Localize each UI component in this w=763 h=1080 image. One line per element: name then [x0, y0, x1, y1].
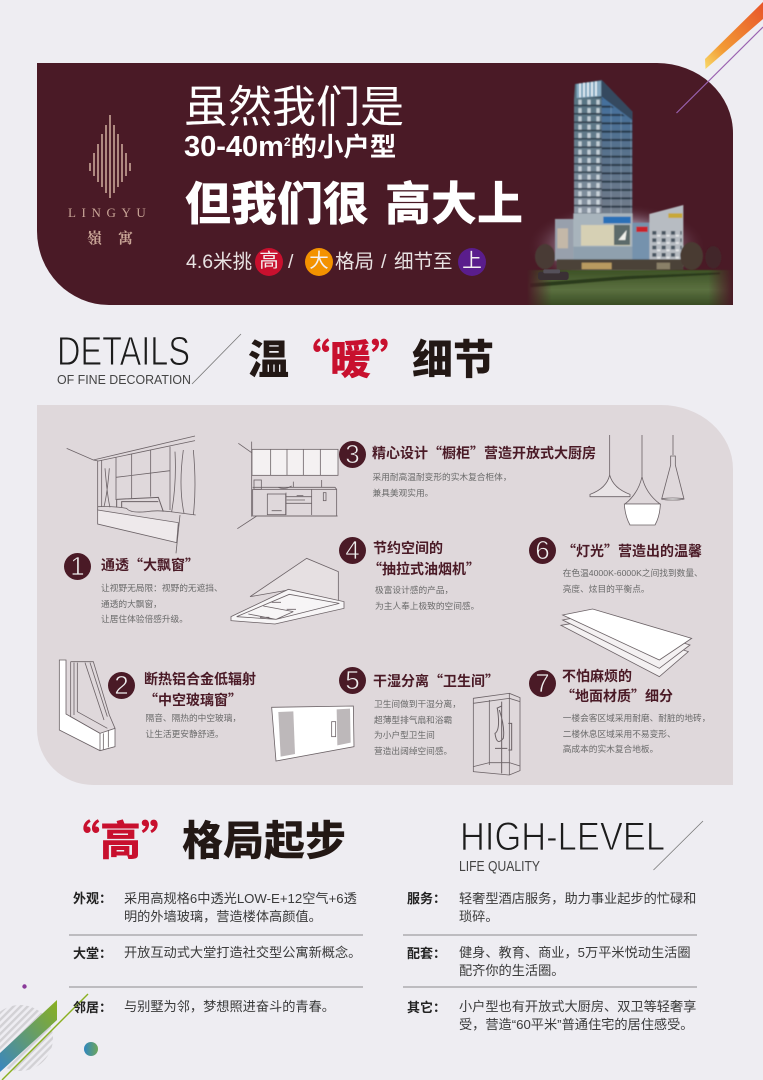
- item 1 text: 通透的大飘窗，: [101, 599, 162, 609]
- label: service: 服务：: [407, 888, 446, 907]
- icon: bay window: [67, 436, 196, 553]
- item 3: cabinets: [339, 439, 596, 498]
- item 5 text: [374, 699, 461, 756]
- heading: details english: OF FINE DECORATION: [57, 372, 191, 387]
- item 7 text: [563, 713, 710, 754]
- item 3 text: 兼具美观实用。: [372, 488, 433, 498]
- item 5 title: 干湿分离“卫生间”: [373, 671, 499, 691]
- item 2: insulated glass: [108, 669, 256, 739]
- text: other: 受，营造“60平米”普通住宅的居住感受。: [459, 1017, 693, 1032]
- number badge 7: 7: [535, 668, 550, 698]
- item 2 text: [146, 713, 241, 739]
- item 1 text: [101, 583, 223, 624]
- item 3 title: 精心设计“橱柜”营造开放式大厨房: [372, 443, 596, 463]
- text: service: [459, 891, 696, 924]
- feature list: [69, 888, 697, 1032]
- label: amenities: 配套：: [407, 943, 446, 962]
- item 1: bay window: [64, 551, 223, 624]
- item 1 title: 通透“大飘窗”: [101, 555, 199, 575]
- heading: high-level layout: “高”格局起步: [59, 807, 346, 867]
- item 5 text: 为小户型卫生间: [374, 730, 435, 740]
- heading: details english: DETAILS: [57, 328, 190, 374]
- item 4 title line 2: “抽拉式油烟机”: [368, 559, 480, 579]
- item 6: lighting: [529, 535, 703, 594]
- item 6 title: “灯光”营造出的温馨: [562, 541, 702, 561]
- item 7 text: 二楼休息区域采用不易变形、: [563, 729, 676, 739]
- item 6 text: 在色温4000K-6000K之间找到数量、: [563, 568, 703, 578]
- item 4 text: [375, 585, 479, 611]
- item 2 title: 断热铝合金低辐射: [144, 669, 256, 689]
- number badge 7: [529, 670, 556, 697]
- item 7 title: 不怕麻烦的: [562, 666, 632, 686]
- hero subline: 大: [309, 250, 329, 272]
- number badge 1: [64, 553, 91, 580]
- label: lobby: 大堂：: [73, 943, 112, 962]
- heading: high level english: LIFE QUALITY: [459, 858, 540, 875]
- item 5 text: 超薄型排气扇和浴霸: [374, 715, 452, 725]
- icon: aluminium window profile: [59, 660, 115, 751]
- item 2 title: [144, 669, 256, 710]
- text: service: 轻奢型酒店服务，助力事业起步的忙碌和: [459, 891, 696, 906]
- icon: bath heater: [272, 706, 354, 761]
- text: other: 小户型也有开放式大厨房、双卫等轻奢享: [459, 999, 696, 1014]
- number badge 2: 2: [114, 670, 129, 700]
- number badge 4: 4: [345, 535, 360, 565]
- label: neighbours: 邻居：: [73, 997, 112, 1016]
- item 4 text: 为主人奉上极致的空间感。: [375, 601, 479, 611]
- hero main slogan: 但我们很 高大上: [185, 168, 523, 234]
- text: amenities: 健身、教育、商业，5万平米悦动生活圈: [459, 945, 691, 960]
- text: amenities: [459, 945, 691, 978]
- icon: kitchen cabinets: [237, 442, 338, 529]
- icon: shower room: [473, 693, 520, 775]
- building rendering: [529, 80, 731, 305]
- item 7 text: 一楼会客区域采用耐磨、耐脏的地砖，: [563, 713, 710, 723]
- hero subline: 格局: [335, 251, 374, 273]
- logo chinese name: 嶺寓: [87, 227, 149, 248]
- logo: [68, 115, 151, 248]
- item 1 text: 让居住体验倍感升级。: [101, 614, 188, 624]
- icon: range hood: [231, 558, 344, 624]
- icon: floor planks: [561, 609, 692, 677]
- text: exterior: 采用高规格6中透光LOW-E+12空气+6透: [124, 891, 357, 906]
- item 5 text: 卫生间做到干湿分离，: [374, 699, 461, 709]
- item 4: range hood: [339, 535, 480, 611]
- number badge 3: 3: [345, 439, 360, 469]
- hero banner: [37, 63, 733, 305]
- item 7: flooring: [529, 666, 710, 754]
- hero subline: 高: [259, 250, 279, 272]
- hero subline: /: [288, 251, 293, 273]
- item 7 title line 2: “地面材质”细分: [561, 686, 673, 706]
- item 3 text: [372, 472, 512, 498]
- icon: pendant lamps: [590, 435, 684, 525]
- decoration: bottom-left shapes: [0, 984, 98, 1080]
- number badge 5: 5: [345, 665, 360, 695]
- number badge 4: [339, 537, 366, 564]
- item 4 text: 极富设计感的产品，: [375, 585, 453, 595]
- item 1 text: 让视野无局限：视野的无遮挡、: [101, 583, 223, 593]
- number badge 6: [529, 537, 556, 564]
- item 6 text: [563, 568, 703, 594]
- heading: high level english: HIGH-LEVEL: [460, 815, 665, 859]
- item 5 text: 营造出阔绰空间感。: [374, 746, 452, 756]
- panel: fine decoration details: [37, 405, 733, 785]
- logo wordmark: LINGYU: [68, 205, 151, 220]
- number badge 3: [339, 441, 366, 468]
- heading: warm details: 温“暖”细节: [248, 326, 494, 386]
- text: other: [459, 999, 696, 1032]
- item 4 title: 节约空间的: [373, 538, 443, 558]
- item 3 text: 采用耐高温耐变形的实木复合柜体，: [372, 472, 512, 482]
- number badge 1: 1: [70, 551, 85, 581]
- hero heading line 1: 虽然我们是: [184, 71, 404, 135]
- number badge 2: [108, 672, 135, 699]
- icon: orange corner ribbon: [676, 2, 763, 114]
- label: exterior: 外观：: [73, 888, 112, 907]
- item 2 title: “中空玻璃窗”: [144, 690, 242, 710]
- hero subline: 4.6米挑: [186, 251, 252, 273]
- icon: logo diamond stripes: [89, 115, 131, 198]
- label: other: 其它：: [407, 997, 446, 1016]
- item 6 text: 亮度、炫目的平衡点。: [563, 584, 650, 594]
- hero subline: [186, 248, 486, 276]
- hero subline: 上: [462, 250, 482, 272]
- text: exterior: 明的外墙玻璃，营造楼体高颜值。: [124, 909, 322, 924]
- item 7 text: 高成本的实木复合地板。: [563, 744, 658, 754]
- number badge 6: 6: [535, 535, 550, 565]
- hero heading line 2: 30-40m2的小户型: [184, 131, 396, 163]
- item 2 text: 隔音、隔热的中空玻璃，: [146, 713, 241, 723]
- hero subline: 细节至: [394, 251, 453, 273]
- text: lobby: 开放互动式大堂打造社交型公寓新概念。: [124, 945, 361, 960]
- item 5: bathroom: [339, 665, 499, 756]
- number badge 5: [339, 667, 366, 694]
- hero subline: /: [381, 251, 386, 273]
- text: exterior: [124, 891, 357, 924]
- text: service: 琐碎。: [459, 909, 499, 924]
- item 2 text: 让生活更安静舒适。: [146, 729, 224, 739]
- text: neighbours: 与别墅为邻，梦想照进奋斗的青春。: [124, 999, 335, 1014]
- text: amenities: 配齐你的生活圈。: [459, 963, 564, 978]
